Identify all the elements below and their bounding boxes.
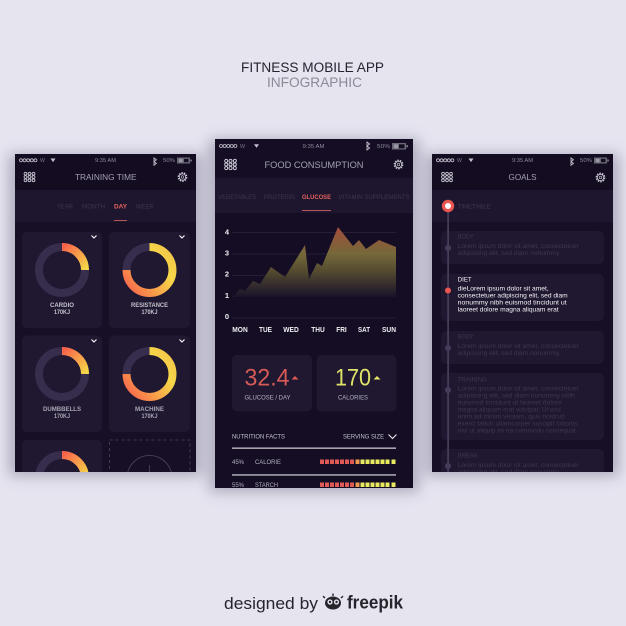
area chart: TUE <box>259 327 272 334</box>
card: body: BODY <box>458 234 474 240</box>
card: machine <box>109 336 190 432</box>
card: dumbbells <box>22 336 102 432</box>
card: training: euismod tincidunt ut laoreet dolore <box>458 399 562 406</box>
icon: menu <box>225 159 236 170</box>
card: cardio: CARDIO <box>50 302 74 309</box>
nutrition facts table: CALORIE <box>255 459 281 466</box>
status bar: 50% <box>580 158 592 164</box>
card: body 2 <box>441 331 604 364</box>
card: resistance: 170KJ <box>142 309 158 316</box>
nutrition facts table: STARCH <box>255 482 278 489</box>
heading: training time: TRAINING TIME <box>75 172 137 182</box>
title: INFOGRAPHIC <box>267 75 362 90</box>
stat card: glucose: GLUCOSE / DAY <box>244 394 290 402</box>
status bar: 50% <box>163 158 175 164</box>
area chart: THU <box>311 327 325 334</box>
status bar: 9:35 AM <box>302 144 325 150</box>
status bar: W <box>240 144 246 150</box>
card: break: Lorem ipsum dolor sit amet, consectetuer <box>458 462 579 469</box>
nutrition facts table: NUTRITION FACTS <box>232 434 285 440</box>
card: cardio: 170KJ <box>54 309 70 316</box>
area chart: MON <box>232 327 248 334</box>
icon: settings <box>596 173 605 182</box>
card: dumbbells: 170KJ <box>54 413 70 420</box>
status bar <box>436 158 609 165</box>
card: diet: nonummy nibh euismod tincidunt ut <box>458 299 567 306</box>
tabs: YEAR <box>57 204 73 210</box>
card: break <box>441 449 604 472</box>
tabs <box>218 194 410 211</box>
card: resistance <box>109 232 190 328</box>
area chart: SUN <box>382 327 396 334</box>
card: diet: DIET <box>458 276 472 284</box>
status bar: 9:35 AM <box>95 158 116 164</box>
card: diet <box>441 274 604 321</box>
title <box>241 60 384 90</box>
phone shadows <box>9 139 619 492</box>
tabs: DAY <box>114 204 128 210</box>
area chart <box>225 227 396 334</box>
card: body: adipiscing elit, sed diam nonummy. <box>458 250 561 257</box>
stat card: glucose: 32.4 <box>244 364 290 392</box>
freepik credit: designed by <box>224 594 319 613</box>
area chart: 4 <box>225 228 230 236</box>
status bar: W <box>457 158 462 164</box>
card: training: TRAINING <box>458 376 487 384</box>
card: partial <box>22 440 102 472</box>
card: training <box>441 373 604 440</box>
title: FITNESS MOBILE APP <box>241 60 384 75</box>
tabs: VEGETABLES <box>218 194 256 201</box>
panel: goals phone <box>432 154 613 489</box>
card: add new <box>109 440 190 472</box>
card: diet: consectetuer adipiscing elit, sed diam <box>458 292 568 299</box>
card: body <box>441 231 604 264</box>
card: body 2: Lorem ipsum dolor sit amet, consectetuer <box>458 343 579 350</box>
card: cardio <box>22 232 102 328</box>
area chart: 1 <box>225 291 229 300</box>
timetable label: TIMETABLE <box>458 204 491 210</box>
status bar <box>20 158 192 165</box>
card: break: BREAK <box>458 452 478 460</box>
area chart: 3 <box>225 248 229 258</box>
heading: food consumption: FOOD CONSUMPTION <box>264 159 364 170</box>
card: body 2: adipiscing elit, sed diam nonummy. <box>458 350 561 357</box>
card: training: adipiscing elit, sed diam nonummy nibh <box>458 392 575 399</box>
status bar: 9:35 AM <box>512 158 533 164</box>
card: body 2: BODY <box>458 334 474 340</box>
status bar: W <box>40 158 45 164</box>
heading: goals: GOALS <box>508 172 537 182</box>
nutrition facts table: 55% <box>232 482 244 489</box>
freepik credit <box>224 592 404 613</box>
card: machine: MACHINE <box>135 406 164 413</box>
stat card: calories: CALORIES <box>338 394 368 402</box>
card: break: adipiscing elit, sed diam nonummy. <box>458 469 561 476</box>
icon: settings <box>394 160 403 169</box>
tabs: PROTEINS <box>264 194 295 201</box>
area chart: WED <box>283 327 299 334</box>
area chart: 0 <box>225 312 229 321</box>
area chart: SAT <box>358 327 371 334</box>
card: diet: dieLorem ipsum dolor sit amet, <box>458 285 549 292</box>
icon: settings <box>178 173 187 181</box>
stat card: calories <box>316 355 396 412</box>
tabs: VITAMIN SUPPLEMENTS <box>338 194 410 201</box>
panel: training time phone <box>15 154 196 501</box>
area chart: FRI <box>336 327 347 334</box>
tabs <box>57 204 155 221</box>
card: diet: laoreet dolore magna aliquam erat <box>458 306 559 314</box>
nutrition facts table <box>232 434 396 489</box>
card: machine: 170KJ <box>142 413 158 420</box>
tabs: WEEK <box>136 204 155 210</box>
card: training: Lorem ipsum dolor sit amet, consectetuer <box>458 385 579 392</box>
icon: menu <box>24 172 35 182</box>
nutrition facts table: 45% <box>232 459 244 466</box>
nutrition facts table: SERVING SIZE <box>343 434 384 440</box>
tabs: GLUCOSE <box>302 194 332 201</box>
card: training: exerci tation ullamcorper suscipit lobortis <box>458 420 578 428</box>
stat card: glucose <box>232 355 312 412</box>
card: training: enim ad minim veniam, quis nostrud <box>458 414 565 420</box>
card: training: nisl ut aliquip ex ea commodo consequat. <box>458 428 578 434</box>
area chart: 2 <box>225 270 229 278</box>
card: dumbbells: DUMBBELLS <box>43 406 81 413</box>
card: resistance: RESISTANCE <box>131 302 168 309</box>
status bar: 50% <box>377 144 390 150</box>
tabs: MONTH <box>82 204 105 210</box>
card: training: magna aliquam erat volutpat. Ut wisi <box>458 406 561 414</box>
icon: menu <box>442 172 452 182</box>
stat card: calories: 170 <box>335 364 371 392</box>
freepik credit: freepik <box>347 592 404 612</box>
timeline <box>442 200 454 476</box>
status bar <box>220 142 408 150</box>
card: body: Lorem ipsum dolor sit amet, consectetuer <box>458 243 579 250</box>
panel: food consumption phone <box>215 139 413 489</box>
